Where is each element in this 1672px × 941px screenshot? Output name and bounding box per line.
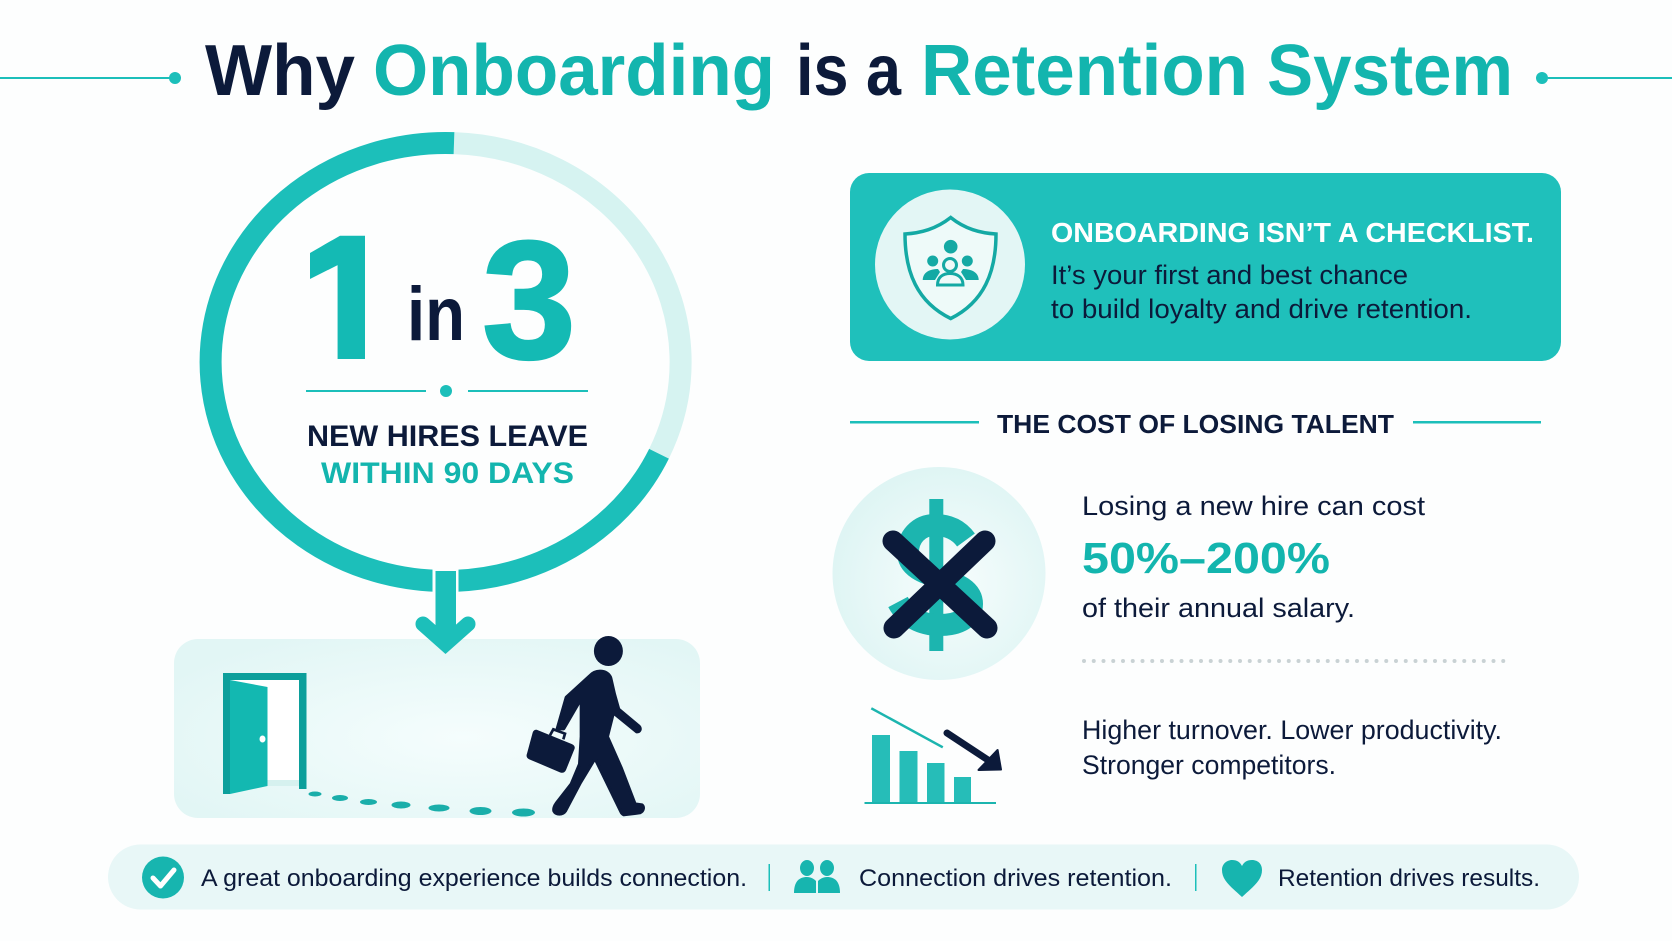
impact text: Higher turnover. Lower productivity. xyxy=(1082,715,1502,745)
heading: cost of losing talent: THE COST OF LOSING TALENT xyxy=(997,409,1394,439)
icon: heart xyxy=(1222,860,1262,897)
icon: people xyxy=(794,860,840,893)
stat ring xyxy=(211,143,681,581)
stat 1 in 3 xyxy=(310,236,572,362)
cost text xyxy=(1082,491,1426,623)
title: Retention xyxy=(921,31,1248,111)
stat caption: WITHIN 90 DAYS xyxy=(321,457,574,490)
icon: shield with team xyxy=(875,190,1025,340)
banner text: to build loyalty and drive retention. xyxy=(1051,294,1472,324)
title: Onboarding xyxy=(373,31,775,111)
takeaway 1: A great onboarding experience builds connection. xyxy=(201,865,747,892)
cost text: 50%–200% xyxy=(1082,534,1330,583)
cost text: Losing a new hire can cost xyxy=(1082,491,1426,521)
panel: checklist banner xyxy=(850,173,1561,361)
banner heading: ONBOARDING ISN’T A CHECKLIST. xyxy=(1051,217,1534,248)
icon: declining bar chart xyxy=(864,708,1001,804)
icon: open door xyxy=(223,673,306,794)
stat caption xyxy=(307,420,588,490)
stat 1 in 3: in xyxy=(407,272,465,357)
title: System xyxy=(1267,31,1513,111)
stat 1 in 3: 1 xyxy=(296,204,372,396)
panel: leaving scene xyxy=(174,636,700,818)
banner text xyxy=(1051,260,1472,324)
impact text xyxy=(1082,715,1502,780)
arrow: ring down to scene xyxy=(423,568,468,644)
title xyxy=(205,31,1513,111)
takeaway 2: Connection drives retention. xyxy=(859,865,1172,892)
title: Why xyxy=(205,31,355,111)
panel: bottom takeaway bar xyxy=(108,844,1579,910)
title rule left xyxy=(0,72,181,84)
takeaway 3: Retention drives results. xyxy=(1278,865,1540,892)
stat divider xyxy=(306,385,588,397)
icon: check circle xyxy=(142,856,184,898)
cost text: of their annual salary. xyxy=(1082,593,1355,623)
stat caption: NEW HIRES LEAVE xyxy=(307,420,588,453)
footprints trail xyxy=(308,792,535,816)
impact text: Stronger competitors. xyxy=(1082,750,1336,780)
banner text: It’s your first and best chance xyxy=(1051,260,1408,290)
icon: crossed-out dollar xyxy=(832,467,1046,680)
title rule right xyxy=(1536,72,1672,84)
icon: walking person with briefcase xyxy=(527,636,643,815)
title: is a xyxy=(796,31,902,111)
stat 1 in 3: 3 xyxy=(482,206,576,394)
